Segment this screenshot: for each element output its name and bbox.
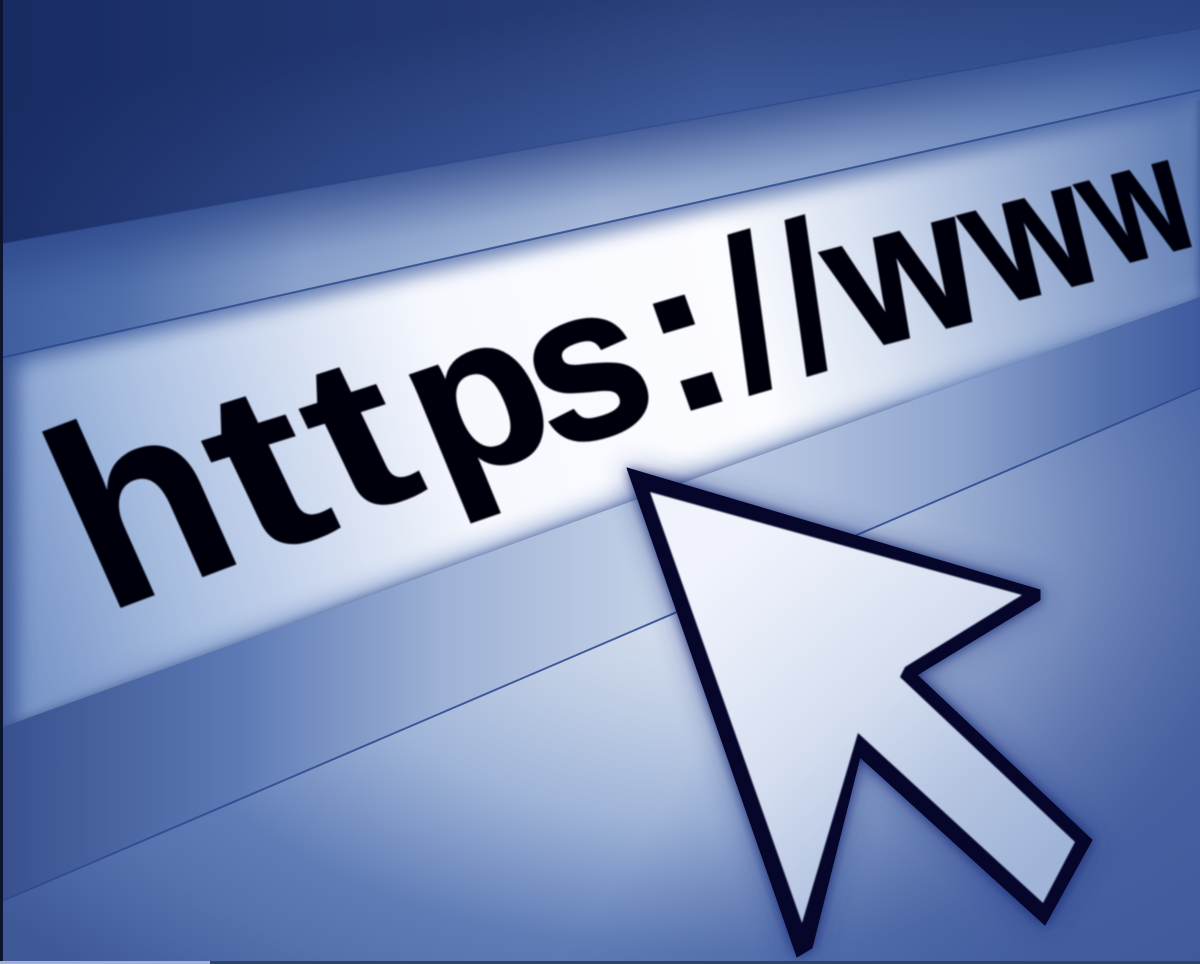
url text: https://www [7, 103, 1200, 665]
letter h: h [7, 341, 273, 665]
arrow wide glow [627, 468, 1092, 957]
letter w: w [926, 124, 1131, 340]
slash: / [748, 179, 865, 416]
background: lower band under the address bar [0, 297, 1200, 902]
arrow fill [650, 492, 1075, 923]
address bar panel [0, 90, 1200, 740]
arrow tight glow [627, 468, 1092, 957]
letter p: p [366, 262, 583, 528]
letter t: t [161, 333, 365, 602]
icon: arrow cursor [627, 468, 1092, 957]
slash: / [687, 191, 813, 436]
colon: : [602, 205, 759, 461]
letter w: w [790, 149, 1012, 390]
arrow outline [627, 468, 1092, 957]
background: upper toolbar band [0, 28, 1200, 366]
background: floor panel [0, 388, 1200, 964]
letter t: t [261, 309, 451, 559]
letter s: s [488, 230, 680, 496]
background: dark top band [0, 0, 1200, 400]
